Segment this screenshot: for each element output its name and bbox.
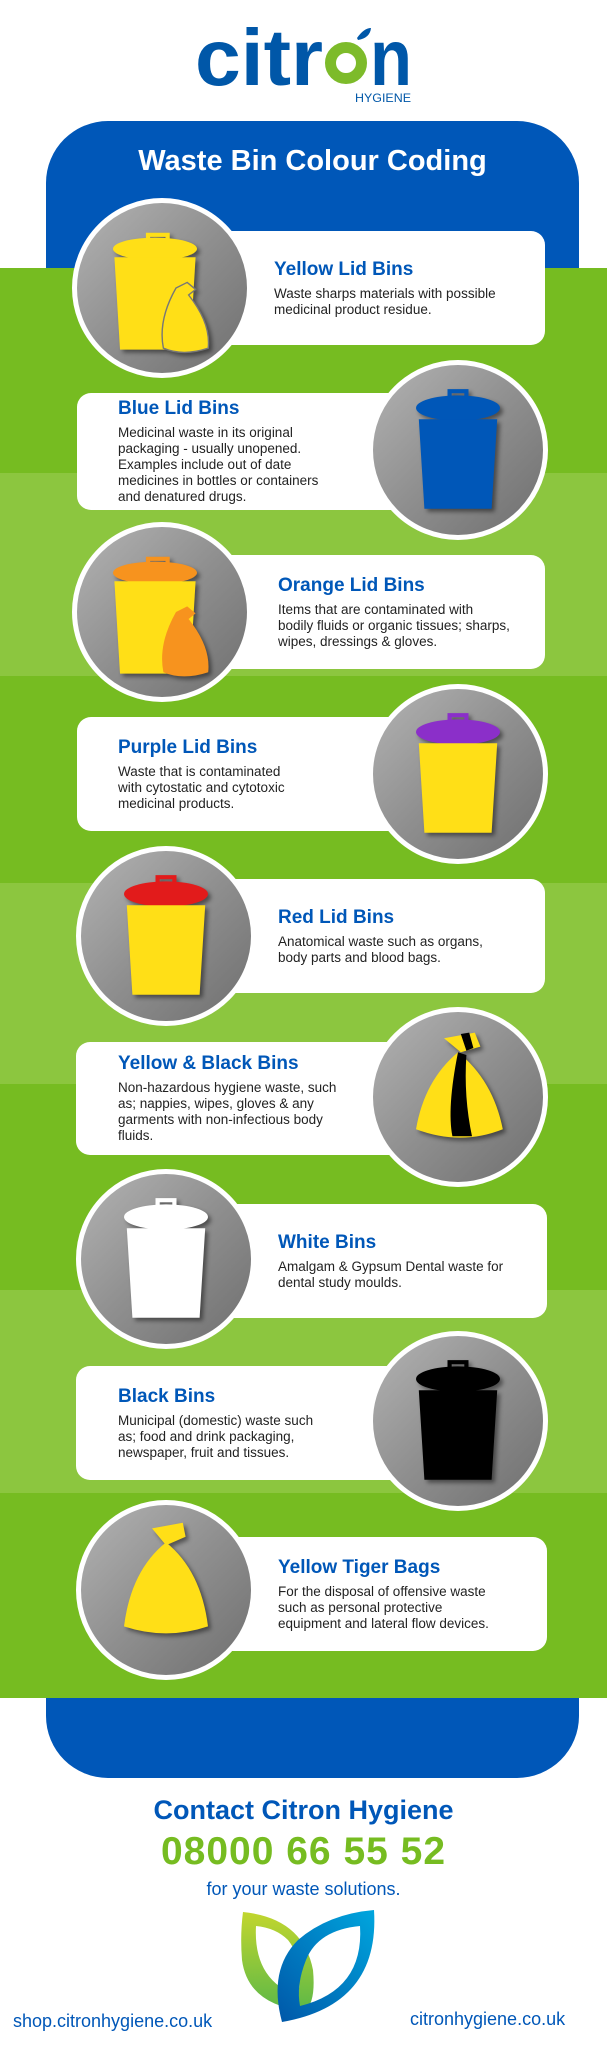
card: blue lid: medicines in bottles or containers: [118, 473, 318, 488]
card: blue lid: packaging - usually unopened.: [118, 441, 301, 456]
card: yellow lid: medicinal product residue.: [274, 302, 432, 316]
card: blue lid: [77, 393, 417, 510]
card: yellow lid: Waste sharps materials with possible: [274, 286, 496, 300]
card: yellow lid: [200, 231, 545, 345]
card: purple lid: Waste that is contaminated: [118, 764, 280, 778]
icon: red lid bin: [76, 846, 256, 1026]
title: Waste Bin Colour Coding: [138, 145, 487, 177]
card: black: Municipal (domestic) waste such: [118, 1412, 313, 1428]
footer link left: shop.citronhygiene.co.uk: [13, 2011, 212, 2031]
card: white: [200, 1204, 547, 1318]
icon: yellow bin and bag: [72, 198, 252, 378]
card: yellow tiger: equipment and lateral flow devices.: [278, 1616, 489, 1630]
card: purple lid: [77, 717, 417, 831]
card: yellow and black: Yellow & Black Bins: [118, 1053, 299, 1074]
card: yellow and black: garments with non-infectious body: [118, 1112, 323, 1127]
card: orange lid: [200, 555, 545, 669]
card: yellow and black: as; nappies, wipes, gloves & any: [118, 1096, 314, 1111]
card: yellow tiger: For the disposal of offensive waste: [278, 1584, 486, 1598]
card: purple lid: Purple Lid Bins: [118, 736, 257, 758]
card: blue lid: and denatured drugs.: [118, 489, 246, 504]
icon: leaves logo: [241, 1910, 374, 2022]
footer link right: citronhygiene.co.uk: [410, 2009, 565, 2029]
card: red lid: [200, 879, 545, 993]
icon: yellow bag: [76, 1500, 256, 1680]
tagline: for your waste solutions.: [206, 1879, 401, 1899]
icon: yellow black bag: [368, 1007, 548, 1187]
card: blue lid: Examples include out of date: [118, 457, 291, 472]
card: yellow and black: [76, 1042, 416, 1155]
card: yellow and black: Non-hazardous hygiene waste, such: [118, 1080, 336, 1095]
card: white: dental study moulds.: [278, 1274, 402, 1290]
card: yellow tiger: Yellow Tiger Bags: [278, 1556, 440, 1578]
blue panel: [46, 121, 579, 1778]
card: orange lid: Items that are contaminated with: [278, 602, 473, 616]
card: blue lid: Medicinal waste in its original: [118, 425, 293, 440]
card: yellow lid: Yellow Lid Bins: [274, 258, 413, 280]
card: black: as; food and drink packaging,: [118, 1428, 294, 1444]
card: yellow and black: fluids.: [118, 1128, 153, 1143]
green bands: [0, 268, 607, 473]
card: red lid: body parts and blood bags.: [278, 950, 441, 964]
card: black: newspaper, fruit and tissues.: [118, 1444, 289, 1460]
icon: blue bin: [368, 360, 548, 540]
icon: purple lid bin: [368, 684, 548, 864]
card: purple lid: medicinal products.: [118, 796, 234, 810]
card: red lid: Red Lid Bins: [278, 906, 394, 928]
card: yellow tiger: [200, 1537, 547, 1651]
card: blue lid: Blue Lid Bins: [118, 398, 239, 419]
card: orange lid: bodily fluids or organic tissues; sharps,: [278, 618, 510, 632]
contact heading: Contact Citron Hygiene: [153, 1795, 454, 1825]
card: yellow tiger: such as personal protective: [278, 1600, 442, 1614]
card: black: [76, 1366, 416, 1480]
card: white: White Bins: [278, 1232, 376, 1252]
logo: [195, 20, 412, 105]
icon: black bin: [368, 1331, 548, 1511]
card: white: Amalgam & Gypsum Dental waste for: [278, 1258, 503, 1274]
logo: HYGIENE: [355, 91, 411, 105]
card: purple lid: with cytostatic and cytotoxic: [118, 780, 285, 794]
icon: white bin: [76, 1169, 256, 1349]
card: red lid: Anatomical waste such as organs,: [278, 934, 483, 948]
icon: orange lid bin and bag: [72, 522, 252, 702]
card: orange lid: Orange Lid Bins: [278, 574, 425, 596]
card: black: Black Bins: [118, 1386, 215, 1406]
phone number: 08000 66 55 52: [161, 1830, 446, 1873]
card: orange lid: wipes, dressings & gloves.: [278, 634, 437, 648]
